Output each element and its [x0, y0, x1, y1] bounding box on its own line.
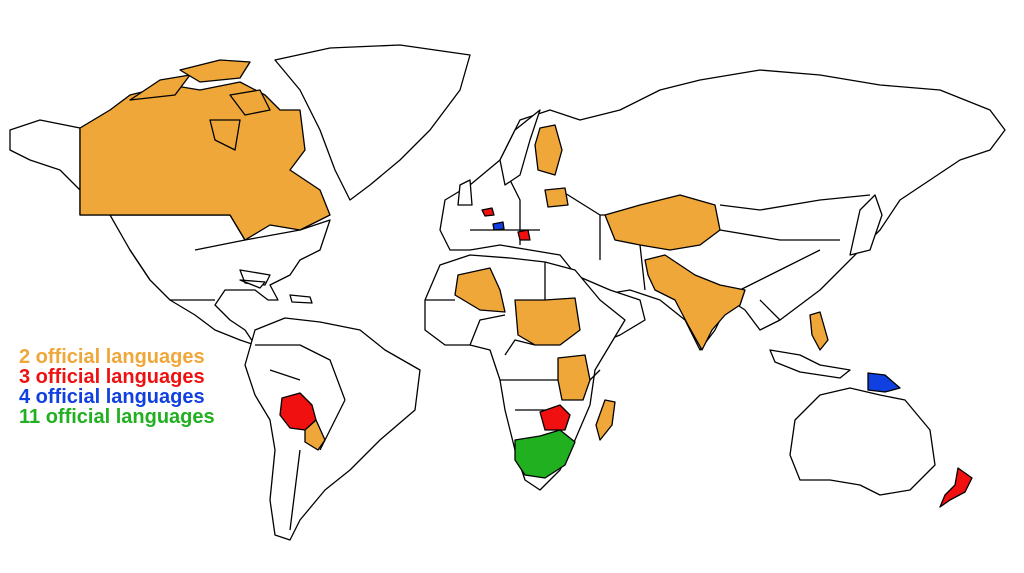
caribbean islands	[240, 280, 312, 303]
uk	[458, 180, 472, 205]
south africa (11)	[515, 430, 575, 478]
new zealand (3)	[940, 468, 972, 507]
south america	[245, 318, 420, 540]
bolivia (3 languages)	[280, 393, 316, 430]
indonesia	[770, 350, 850, 378]
australia	[790, 388, 935, 495]
belarus	[545, 188, 568, 207]
papua new guinea (4)	[868, 373, 900, 392]
philippines	[810, 312, 828, 350]
canada (2 languages)	[80, 60, 330, 240]
legend: 3 official languages	[19, 366, 205, 388]
belgium / switzerland / bosnia	[482, 208, 494, 216]
legend	[19, 346, 215, 428]
finland	[535, 125, 562, 175]
zimbabwe (3)	[540, 405, 570, 430]
algeria	[455, 268, 505, 312]
legend: 11 official languages	[19, 406, 215, 428]
north america	[10, 120, 330, 345]
chad/sudan/etc	[515, 298, 580, 345]
kazakhstan	[605, 195, 720, 250]
legend: 4 official languages	[19, 386, 205, 408]
eurasia	[440, 70, 1005, 350]
arabia	[572, 275, 645, 345]
japan	[850, 195, 882, 255]
paraguay (2 languages)	[305, 420, 325, 450]
madagascar	[596, 400, 615, 440]
greenland	[275, 45, 470, 200]
internal borders	[470, 160, 870, 320]
afghanistan/pakistan/india	[645, 255, 745, 350]
scandinavia	[500, 110, 540, 185]
kenya/tanzania	[558, 355, 590, 400]
africa	[425, 255, 625, 490]
legend: 2 official languages	[19, 346, 205, 368]
